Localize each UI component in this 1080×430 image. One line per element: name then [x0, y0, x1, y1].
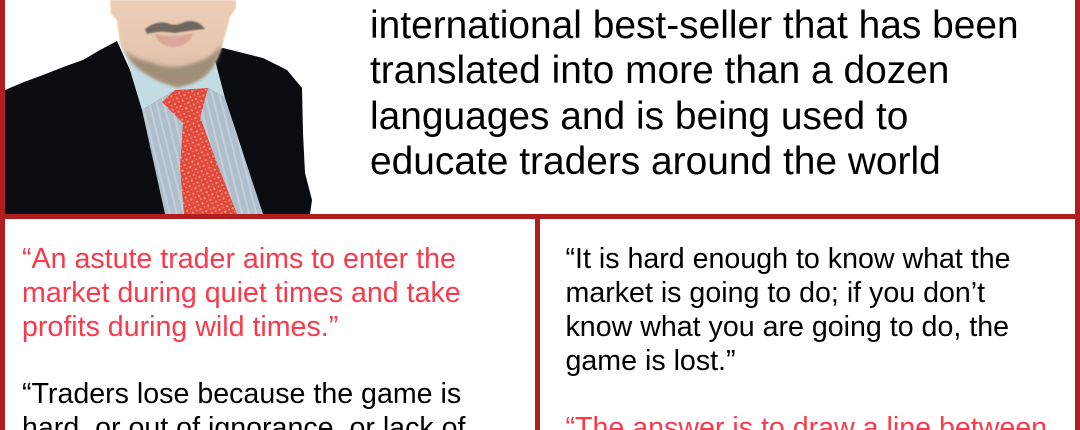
- tie knot: [162, 88, 208, 123]
- right page border: [1075, 0, 1080, 430]
- quote: hard enough: know what you are going to do, the: [566, 310, 1009, 342]
- quote: traders lose: “Traders lose because the game is: [22, 378, 461, 410]
- vertical divider: [535, 219, 540, 430]
- beard: [124, 44, 222, 87]
- quote: astute trader: [22, 242, 461, 342]
- tie blade: [180, 117, 237, 214]
- portrait of the author: [5, 0, 312, 214]
- moustache: [145, 21, 205, 34]
- shirt collar: [120, 44, 225, 110]
- heading text: book description: languages and is being used to: [370, 95, 908, 138]
- quote: hard enough: [566, 242, 1011, 376]
- quote: hard enough: market is going to do; if you don’t: [566, 276, 985, 308]
- shirt: [142, 88, 263, 214]
- mouth and lips: [155, 33, 193, 47]
- quote: astute trader: market during quiet times and take: [22, 276, 461, 308]
- heading text: book description: international best-seller that has been: [370, 4, 1019, 47]
- face: [110, 0, 236, 87]
- quote: astute trader: “An astute trader aims to enter the: [22, 242, 456, 274]
- quote: astute trader: profits during wild times.”: [22, 310, 338, 342]
- heading text: book description: educate traders around the world: [370, 140, 941, 183]
- quote: hard enough: “It is hard enough to know what the: [566, 242, 1011, 274]
- quote: hard enough: game is lost.”: [566, 344, 736, 376]
- heading text: book description: [370, 4, 1019, 183]
- heading text: book description: translated into more than a dozen: [370, 49, 949, 92]
- panel: right quotes: [566, 242, 1047, 430]
- suit jacket: [5, 41, 312, 214]
- left page border: [0, 0, 5, 430]
- horizontal divider: [0, 214, 1080, 219]
- quote: traders lose: [22, 378, 466, 430]
- panel: left quotes: [22, 242, 466, 430]
